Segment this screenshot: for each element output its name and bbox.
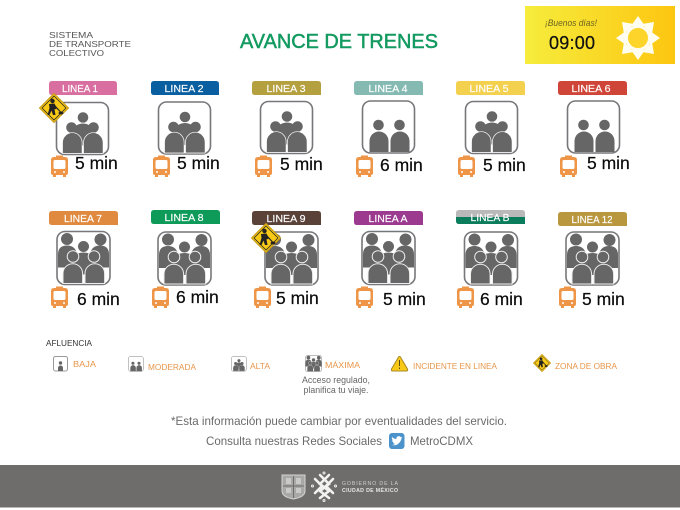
panel: Linea 8: 6 min [176,287,219,307]
legend: baja: BAJA [73,359,96,369]
icon: coat of arms [282,475,305,499]
panel: Linea 7: 6 min [77,289,120,309]
panel: Linea 1 [40,81,118,177]
time: 09:00 [549,33,595,53]
legend: alta [231,356,270,371]
legend: maxima [302,355,370,395]
legend: maxima: MÁXIMA [325,360,360,370]
panel: Linea 9 [252,211,321,308]
panel: Linea B: LINEA B [470,213,510,224]
panel: Linea 12 [558,212,627,309]
legend: maxima: planifica tu viaje. [303,385,369,395]
note: service disclaimer: *Esta información puede cambiar por eventualidades del servicio. [171,414,507,428]
panel: Linea 4: LINEA 4 [368,84,408,95]
legend [46,339,617,395]
panel: Linea A: LINEA A [368,214,408,225]
icon: work zone [40,94,68,122]
legend: baja [54,356,96,371]
panel: Linea 3 [252,81,323,177]
panel: Linea 9: LINEA 9 [266,214,306,225]
logo text: Sistema de Transporte Colectivo: COLECTIVO [49,48,104,58]
panel: Linea 7 [49,211,120,309]
legend: zona de obra [533,354,617,372]
greeting: ¡Buenos días! [545,18,597,29]
panel: Linea 7: LINEA 7 [64,214,102,225]
legend: zona de obra: ZONA DE OBRA [555,361,617,371]
panel: Linea B: 6 min [480,289,523,309]
logo text: Sistema de Transporte Colectivo: SISTEMA [49,30,93,40]
panel: Linea 6: LINEA 6 [572,84,611,95]
legend heading: AFLUENCIA [46,339,93,348]
panel: Linea B [456,210,525,309]
panel: Linea 1: 5 min [75,153,118,173]
legend: moderada: MODERADA [148,362,196,372]
panel: Linea 8 [151,210,220,308]
icon: CDMX logo [312,472,336,502]
legend: alta: ALTA [250,361,270,371]
icon: sun [616,16,660,60]
legend: incidente en linea [391,356,497,371]
logo text: Sistema de Transporte Colectivo: DE TRANSPORTE [49,39,131,49]
panel: Linea 4 [354,81,423,177]
legend: maxima: Acceso regulado, [302,375,370,385]
footer band [0,465,680,508]
panel: Linea 9: 5 min [276,288,319,308]
footer band: CIUDAD DE MÉXICO [342,486,398,494]
government name: GOBIERNO DE LA [342,481,399,487]
panel: Linea 1: LINEA 1 [62,84,98,95]
panel: Linea 5: LINEA 5 [470,84,509,95]
social media line: MetroCDMX [410,434,473,448]
panel: Linea 3: 5 min [280,154,323,174]
social media line: Consulta nuestras Redes Sociales [206,434,382,448]
panel: Linea 12: LINEA 12 [572,215,613,226]
panel: Linea 2: 5 min [177,153,220,173]
title: AVANCE DE TRENES [240,30,438,53]
panel: Linea 12: 5 min [582,289,625,309]
panel: Linea 8: LINEA 8 [164,213,204,224]
panel: Linea 6: 5 min [587,153,630,173]
social media line [206,433,473,449]
panel: Linea 2 [151,81,220,177]
panel: Linea 4: 6 min [380,155,423,175]
icon: twitter [389,433,404,449]
panel: Linea A: 5 min [383,289,426,309]
panel: Linea 3: LINEA 3 [266,84,306,95]
panel: Linea 5 [456,81,526,177]
panel: Linea 5: 5 min [483,155,526,175]
legend: incidente en linea: INCIDENTE EN LINEA [413,361,497,371]
panel: Linea 2: LINEA 2 [164,84,204,95]
panel: Linea 6 [558,81,630,177]
panel: Linea A [354,211,426,309]
legend: moderada [128,356,196,372]
panel: greeting and time [525,6,675,64]
logo text: Sistema de Transporte Colectivo [49,30,131,58]
icon: work zone [252,224,280,252]
